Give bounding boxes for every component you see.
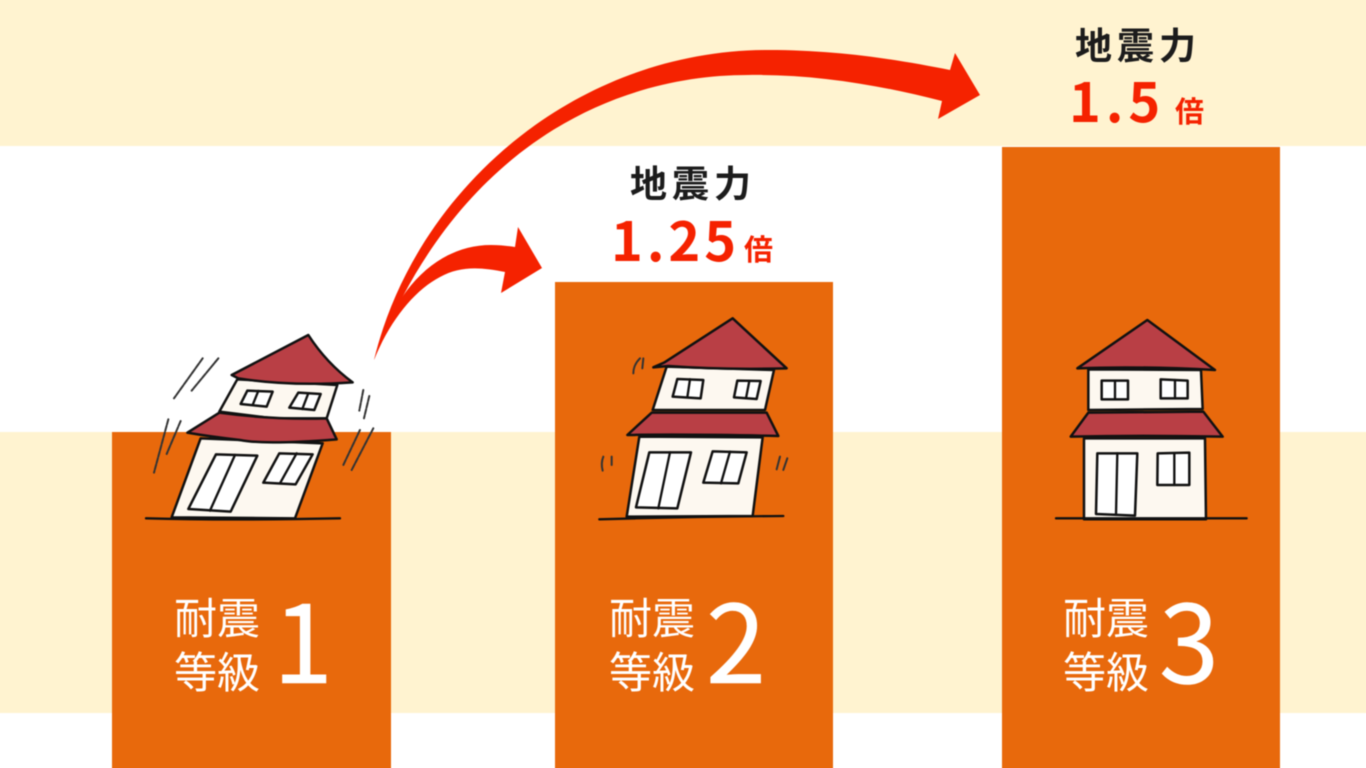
- shake lines: [602, 358, 787, 471]
- callout: seismic force 1.25x: 倍: [744, 227, 773, 269]
- label: grade 2: 2: [706, 559, 766, 715]
- label: grade 3: 等級: [1063, 639, 1149, 701]
- callout: seismic force 1.25x: 1.25: [611, 198, 740, 277]
- label: grade 2: 耐震: [609, 585, 695, 647]
- label: grade 3: 3: [1159, 559, 1219, 715]
- house: grade 3, upright: [1056, 320, 1247, 519]
- label: grade 3: [1063, 559, 1219, 715]
- label: grade 2: 等級: [609, 639, 695, 701]
- callout: seismic force 1.25x: [611, 154, 773, 277]
- label: grade 1: 等級: [174, 639, 260, 701]
- label: grade 1: 耐震: [174, 585, 260, 647]
- house: grade 1, heavily tilted: [146, 335, 373, 519]
- bar: grade 2: [555, 282, 833, 768]
- label: grade 1: [174, 559, 333, 715]
- callout: seismic force 1.5x: [1069, 16, 1204, 138]
- callout: seismic force 1.5x: 地震力: [1075, 16, 1201, 70]
- callout: seismic force 1.25x: 地震力: [630, 154, 756, 208]
- callout: seismic force 1.5x: 1.5: [1069, 59, 1165, 138]
- label: grade 2: [609, 559, 766, 715]
- bar: grade 3: [1002, 147, 1280, 768]
- shake lines: [154, 358, 373, 473]
- label: grade 1: 1: [273, 559, 333, 715]
- callout: seismic force 1.5x: 倍: [1175, 89, 1204, 131]
- house: grade 2, slightly tilted: [599, 318, 787, 519]
- label: grade 3: 耐震: [1063, 585, 1149, 647]
- arrow: grade 1 to grade 3: [374, 50, 980, 360]
- bar: grade 1: [112, 432, 391, 768]
- arrow: grade 1 to grade 2: [374, 227, 542, 360]
